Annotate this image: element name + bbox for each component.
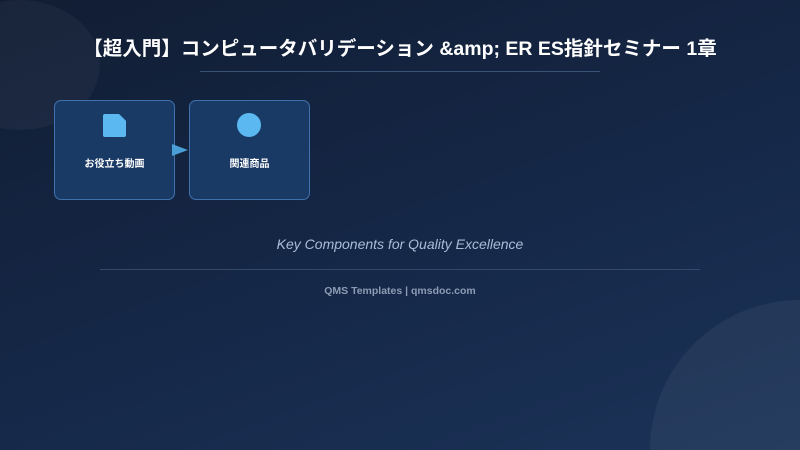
card: products [189, 100, 310, 200]
footer: QMS Templates | qmsdoc.com [324, 285, 476, 297]
arrow [172, 144, 188, 156]
icon: globe [237, 113, 261, 137]
icon: document [103, 114, 126, 137]
card: products: 関連商品 [230, 159, 270, 170]
card: videos [54, 100, 175, 200]
card: videos: お役立ち動画 [84, 159, 144, 170]
title: 【超入門】コンピュータバリデーション &amp; ER ES指針セミナー 1章 [83, 38, 717, 60]
subtitle: Key Components for Quality Excellence [277, 236, 523, 252]
